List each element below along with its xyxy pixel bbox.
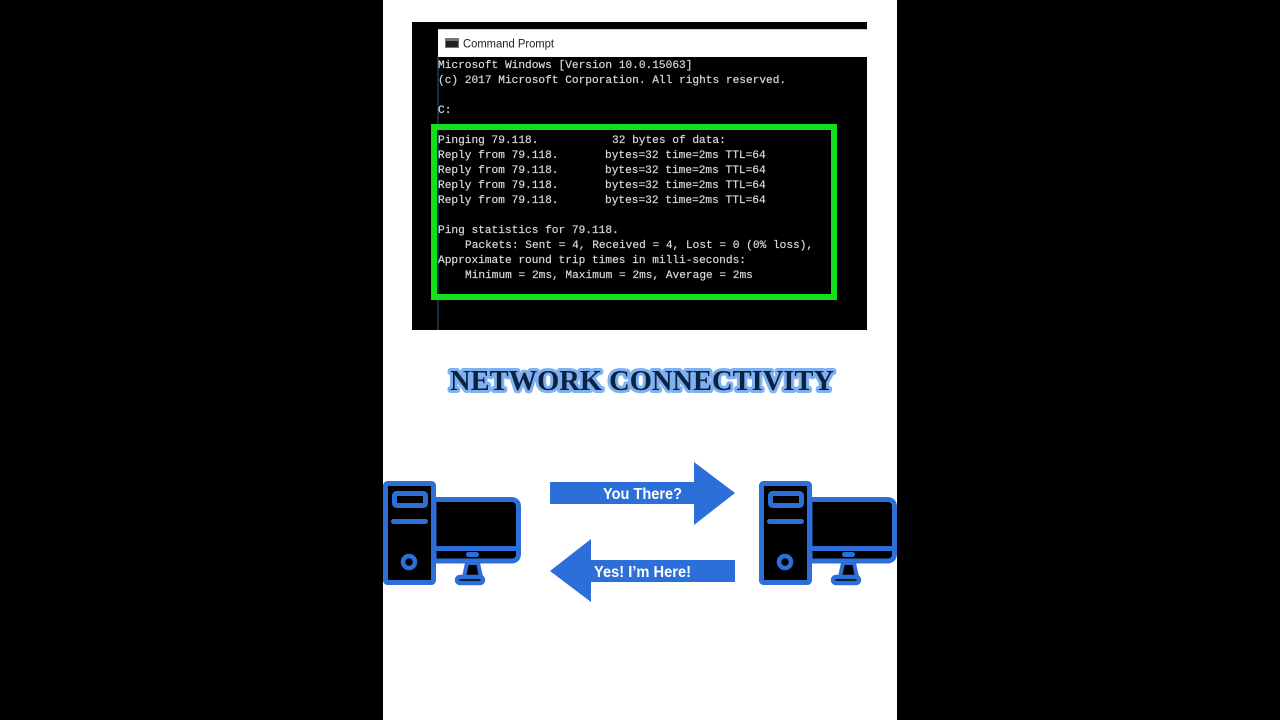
ping output text: bytes=32 time=2ms TTL=64 — [605, 195, 766, 207]
icon: right computer — [762, 484, 894, 583]
ping output text: Approximate round trip times in milli-seconds: — [438, 255, 746, 267]
ping output text: bytes=32 time=2ms TTL=64 — [605, 165, 766, 177]
ping output text: Reply from 79.118. — [438, 195, 559, 207]
arrow: You There? — [550, 462, 735, 525]
green highlight box — [434, 127, 834, 297]
ping output text: Pinging 79.118. — [438, 135, 538, 147]
white page column — [383, 0, 897, 720]
arrow: Yes! I'm Here!: Yes! I’m Here! — [594, 564, 691, 581]
ping output text: Minimum = 2ms, Maximum = 2ms, Average = 2ms — [465, 270, 753, 282]
ping output text: 32 bytes of data: — [612, 135, 726, 147]
icon: left computer — [386, 484, 518, 583]
arrow: Yes! I'm Here! — [550, 539, 735, 602]
console header text: (c) 2017 Microsoft Corporation. All rights reserved. — [438, 75, 786, 87]
ping output text: bytes=32 time=2ms TTL=64 — [605, 150, 766, 162]
command prompt title bar: Command Prompt — [463, 38, 555, 50]
ping output text: Reply from 79.118. — [438, 150, 559, 162]
title: NETWORK CONNECTIVITY — [450, 366, 834, 397]
ping output text: Reply from 79.118. — [438, 165, 559, 177]
console header text — [438, 60, 786, 117]
command prompt screenshot — [412, 22, 867, 330]
ping output text: Ping statistics for 79.118. — [438, 225, 619, 237]
ping output text: Reply from 79.118. — [438, 180, 559, 192]
arrow: You There?: You There? — [603, 486, 682, 503]
ping output text: bytes=32 time=2ms TTL=64 — [605, 180, 766, 192]
ping output text: Packets: Sent = 4, Received = 4, Lost = 0 (0% loss), — [465, 240, 813, 252]
ping output text — [438, 135, 813, 282]
console header text: Microsoft Windows [Version 10.0.15063] — [438, 60, 692, 72]
command prompt title bar — [438, 29, 867, 57]
console header text: C: — [438, 105, 451, 117]
